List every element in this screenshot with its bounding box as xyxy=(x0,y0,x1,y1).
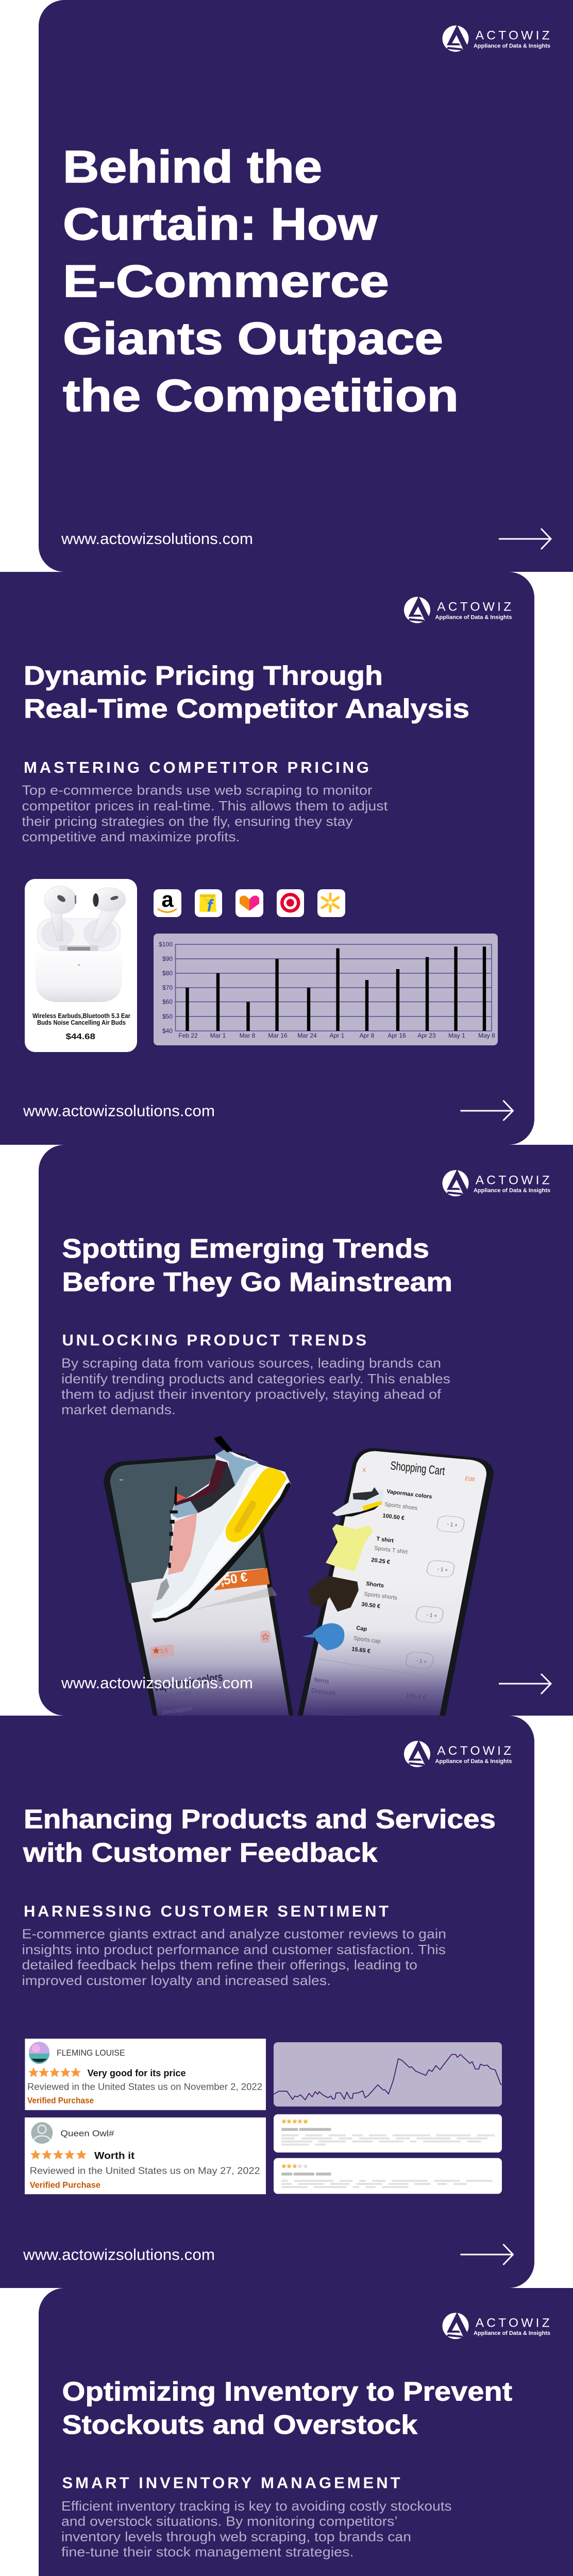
review card: Queen Owl: Verified Purchase xyxy=(30,2180,100,2190)
body text: and overstock situations. By monitoring competitors’ xyxy=(61,2513,398,2529)
heading xyxy=(62,1234,452,1297)
product name: Wireless Earbuds,Bluetooth 5.3 Ear xyxy=(32,1012,130,1020)
left phone screen labels: 3,5 xyxy=(160,1648,168,1655)
right phone cart labels xyxy=(306,1459,476,1722)
logo: Appliance of Data & Insights xyxy=(435,614,512,620)
price tag: 0,50 € xyxy=(213,1570,248,1589)
body text: By scraping data from various sources, leading brands can xyxy=(61,1355,441,1371)
right phone cart labels: Sports T shirt xyxy=(374,1545,408,1555)
bar chart: Apr 23 xyxy=(417,1032,436,1039)
bar chart: $50 xyxy=(162,1013,173,1020)
title xyxy=(63,141,459,421)
title: Giants Outpace xyxy=(63,313,443,364)
logo: ACTOWIZ xyxy=(437,600,511,614)
illustration: phones with shoe and shopping cart xyxy=(61,1436,551,1722)
line chart xyxy=(274,2042,502,2107)
panel: slide 1 cover xyxy=(39,0,573,572)
right phone cart labels: Free Delivery and Re xyxy=(306,1707,365,1722)
logo xyxy=(404,596,512,623)
mini review card: three stars xyxy=(274,2158,502,2194)
left phone screen labels: Vapormax colors xyxy=(153,1670,224,1694)
body text: Efficient inventory tracking is key to avoiding costly stockouts xyxy=(61,2498,452,2514)
phone: product screen xyxy=(104,1453,293,1716)
logo: Appliance of Data & Insights xyxy=(474,2330,550,2336)
icon: flipkart: f xyxy=(207,896,214,915)
product name: Buds Noise Cancelling Air Buds xyxy=(37,1019,126,1026)
body text xyxy=(61,2498,452,2560)
bar chart: $80 xyxy=(162,970,173,977)
icon: lazada xyxy=(235,889,263,917)
arrow xyxy=(499,1674,551,1694)
right phone cart labels: X xyxy=(362,1467,366,1473)
review card: Fleming Louise: Very good for its price xyxy=(88,2068,186,2078)
heading: Stockouts and Overstock xyxy=(62,2410,417,2440)
right phone cart labels: Items xyxy=(314,1676,329,1685)
right phone cart labels: Shopping Cart xyxy=(390,1459,446,1478)
logo: ACTOWIZ xyxy=(476,2316,550,2330)
subheading: SMART INVENTORY MANAGEMENT xyxy=(62,2474,400,2492)
right phone cart labels: 30.50 € xyxy=(361,1601,381,1609)
icon: flipkart xyxy=(195,889,222,917)
subheading: MASTERING COMPETITOR PRICING xyxy=(24,758,369,776)
icon: earbuds case xyxy=(36,886,126,1002)
product card xyxy=(25,879,137,1052)
logo xyxy=(404,1740,512,1767)
logo: ACTOWIZ xyxy=(476,29,550,43)
logo: Appliance of Data & Insights xyxy=(474,43,550,49)
body text: competitive and maximize profits. xyxy=(22,829,240,844)
phone: shopping cart screen xyxy=(298,1448,494,1716)
body text: improved customer loyalty and increased sales. xyxy=(22,1973,331,1988)
icon: target xyxy=(277,889,304,917)
right phone cart labels: Shorts xyxy=(366,1581,384,1589)
heading xyxy=(62,2377,512,2440)
body text: their pricing strategies on the fly, ensuring they stay xyxy=(22,814,352,829)
subheading: HARNESSING CUSTOMER SENTIMENT xyxy=(24,1902,389,1920)
bar chart: Mar 1 xyxy=(210,1032,226,1039)
review card: Queen Owl: Worth it xyxy=(94,2151,135,2162)
bar chart: May 8 xyxy=(478,1032,495,1039)
logo: Appliance of Data & Insights xyxy=(435,1758,512,1765)
heading: Enhancing Products and Services xyxy=(24,1805,496,1835)
body text xyxy=(22,782,388,844)
icon: t-shirt xyxy=(326,1524,373,1571)
website url: www.actowizsolutions.com xyxy=(61,530,253,548)
website url: www.actowizsolutions.com xyxy=(23,1102,215,1120)
logo: Appliance of Data & Insights xyxy=(474,1188,550,1194)
price: $44.68 xyxy=(66,1032,95,1041)
body text xyxy=(22,1926,446,1988)
review card: Fleming Louise xyxy=(25,2039,266,2110)
bar chart: $100 xyxy=(159,941,173,948)
body text: Top e-commerce brands use web scraping to monitor xyxy=(22,782,373,798)
review card: Queen Owl: Reviewed in the United States us on May 27, 2022 xyxy=(30,2165,260,2176)
bar chart: Apr 8 xyxy=(360,1032,375,1039)
review card: Queen Owl: Queen Owl# xyxy=(61,2129,114,2139)
body text xyxy=(61,1355,450,1417)
right phone cart labels: Sports cap xyxy=(353,1635,381,1645)
right phone cart labels: Cap xyxy=(356,1625,367,1633)
body text: insights into product performance and customer satisfaction. This xyxy=(22,1942,446,1957)
panel: slide 5 inventory xyxy=(39,2288,573,2576)
bar chart: Apr 16 xyxy=(387,1032,406,1039)
website url: www.actowizsolutions.com xyxy=(23,2246,215,2264)
review card: Fleming Louise: Verified Purchase xyxy=(27,2096,94,2106)
right phone cart labels: Vapormax colors xyxy=(386,1488,432,1500)
bar chart: $40 xyxy=(162,1027,173,1035)
logo: ACTOWIZ xyxy=(437,1744,511,1758)
bar chart: $60 xyxy=(162,998,173,1006)
right phone cart labels: - 10 € xyxy=(412,1703,429,1713)
title: Behind the xyxy=(63,141,322,192)
body text: inventory levels through web scraping, top brands can xyxy=(61,2529,411,2545)
icon: shorts xyxy=(308,1575,359,1612)
review card: Queen Owl xyxy=(25,2117,266,2194)
body text: market demands. xyxy=(61,1402,176,1417)
left phone screen labels: Sports shoes xyxy=(155,1688,192,1701)
body text: detailed feedback helps them refine their offerings, leading to xyxy=(22,1957,417,1972)
mini review card: five stars xyxy=(274,2114,502,2153)
bar chart: Feb 22 xyxy=(178,1032,198,1039)
right phone cart labels: Edit xyxy=(465,1476,476,1483)
website url: www.actowizsolutions.com xyxy=(61,1674,253,1692)
right phone cart labels: Sports shorts xyxy=(364,1591,398,1601)
body text: identify trending products and categories early. This enables xyxy=(61,1371,450,1386)
left phone screen labels xyxy=(118,1475,271,1716)
right phone cart labels: T shirt xyxy=(376,1536,394,1544)
product name xyxy=(32,1012,130,1026)
logo xyxy=(442,25,550,52)
bar chart: $90 xyxy=(162,955,173,962)
arrow xyxy=(461,1100,513,1121)
right phone cart labels: 15.65 € xyxy=(351,1646,371,1654)
logo xyxy=(442,1170,550,1196)
bar chart: Mar 16 xyxy=(268,1032,288,1039)
heading: Before They Go Mainstream xyxy=(62,1267,452,1297)
right phone cart labels: - 1 + xyxy=(416,1658,427,1665)
heading: Real-Time Competitor Analysis xyxy=(24,694,469,724)
title: E-Commerce xyxy=(63,256,389,307)
left phone screen labels: Description xyxy=(161,1705,193,1716)
title: Curtain: How xyxy=(63,198,378,249)
logo: ACTOWIZ xyxy=(476,1173,550,1187)
review card: Fleming Louise: Reviewed in the United States us on November 2, 2022 xyxy=(27,2082,262,2092)
review card: Fleming Louise: FLEMING LOUISE xyxy=(57,2048,125,2058)
right phone cart labels: 100.50 € xyxy=(382,1513,405,1521)
icon: walmart xyxy=(317,889,345,917)
bar chart: Mar 8 xyxy=(240,1032,256,1039)
right phone cart labels: Sports shoes xyxy=(384,1501,418,1512)
body text: competitor prices in real-time. This allows them to adjust xyxy=(22,798,388,814)
heading: Optimizing Inventory to Prevent xyxy=(62,2377,512,2406)
bar chart: Mar 24 xyxy=(297,1032,317,1039)
illustration: large shoe xyxy=(151,1436,291,1622)
heading: Spotting Emerging Trends xyxy=(62,1234,429,1264)
panel: slide 2 dynamic pricing xyxy=(0,572,534,1145)
left phone screen labels: ← xyxy=(118,1475,125,1483)
heading xyxy=(24,661,469,724)
icon: amazon xyxy=(154,887,181,917)
heading xyxy=(23,1805,496,1868)
right phone cart labels: - 1 + xyxy=(437,1566,448,1573)
body text: fine-tune their stock management strategies. xyxy=(61,2544,353,2560)
subheading: UNLOCKING PRODUCT TRENDS xyxy=(62,1331,366,1349)
right phone cart labels: - 1 + xyxy=(447,1521,458,1529)
body text: them to adjust their inventory proactively, staying ahead of xyxy=(61,1386,442,1402)
panel: slide 3 trends xyxy=(0,1145,573,2576)
icon: amazon: a xyxy=(161,887,174,911)
bar chart: May 1 xyxy=(448,1032,465,1039)
panel: slide 4 customer feedback xyxy=(0,1716,534,2288)
icon: cap xyxy=(302,1623,344,1650)
right phone cart labels: 166,9 € xyxy=(406,1691,427,1701)
icon: small shoe xyxy=(332,1489,383,1516)
bar chart: Apr 1 xyxy=(330,1032,345,1039)
arrow xyxy=(499,529,551,549)
heading: with Customer Feedback xyxy=(23,1838,378,1868)
right phone cart labels: 20.25 € xyxy=(371,1557,391,1565)
body text: E-commerce giants extract and analyze customer reviews to gain xyxy=(22,1926,446,1942)
heading: Dynamic Pricing Through xyxy=(24,661,383,691)
right phone cart labels: Discount xyxy=(311,1687,336,1697)
logo xyxy=(442,2312,550,2339)
arrow xyxy=(461,2244,513,2265)
bar chart xyxy=(154,934,498,1045)
title: the Competition xyxy=(63,370,459,421)
bar chart: $70 xyxy=(162,984,173,991)
right phone cart labels: - 1 + xyxy=(426,1612,437,1619)
